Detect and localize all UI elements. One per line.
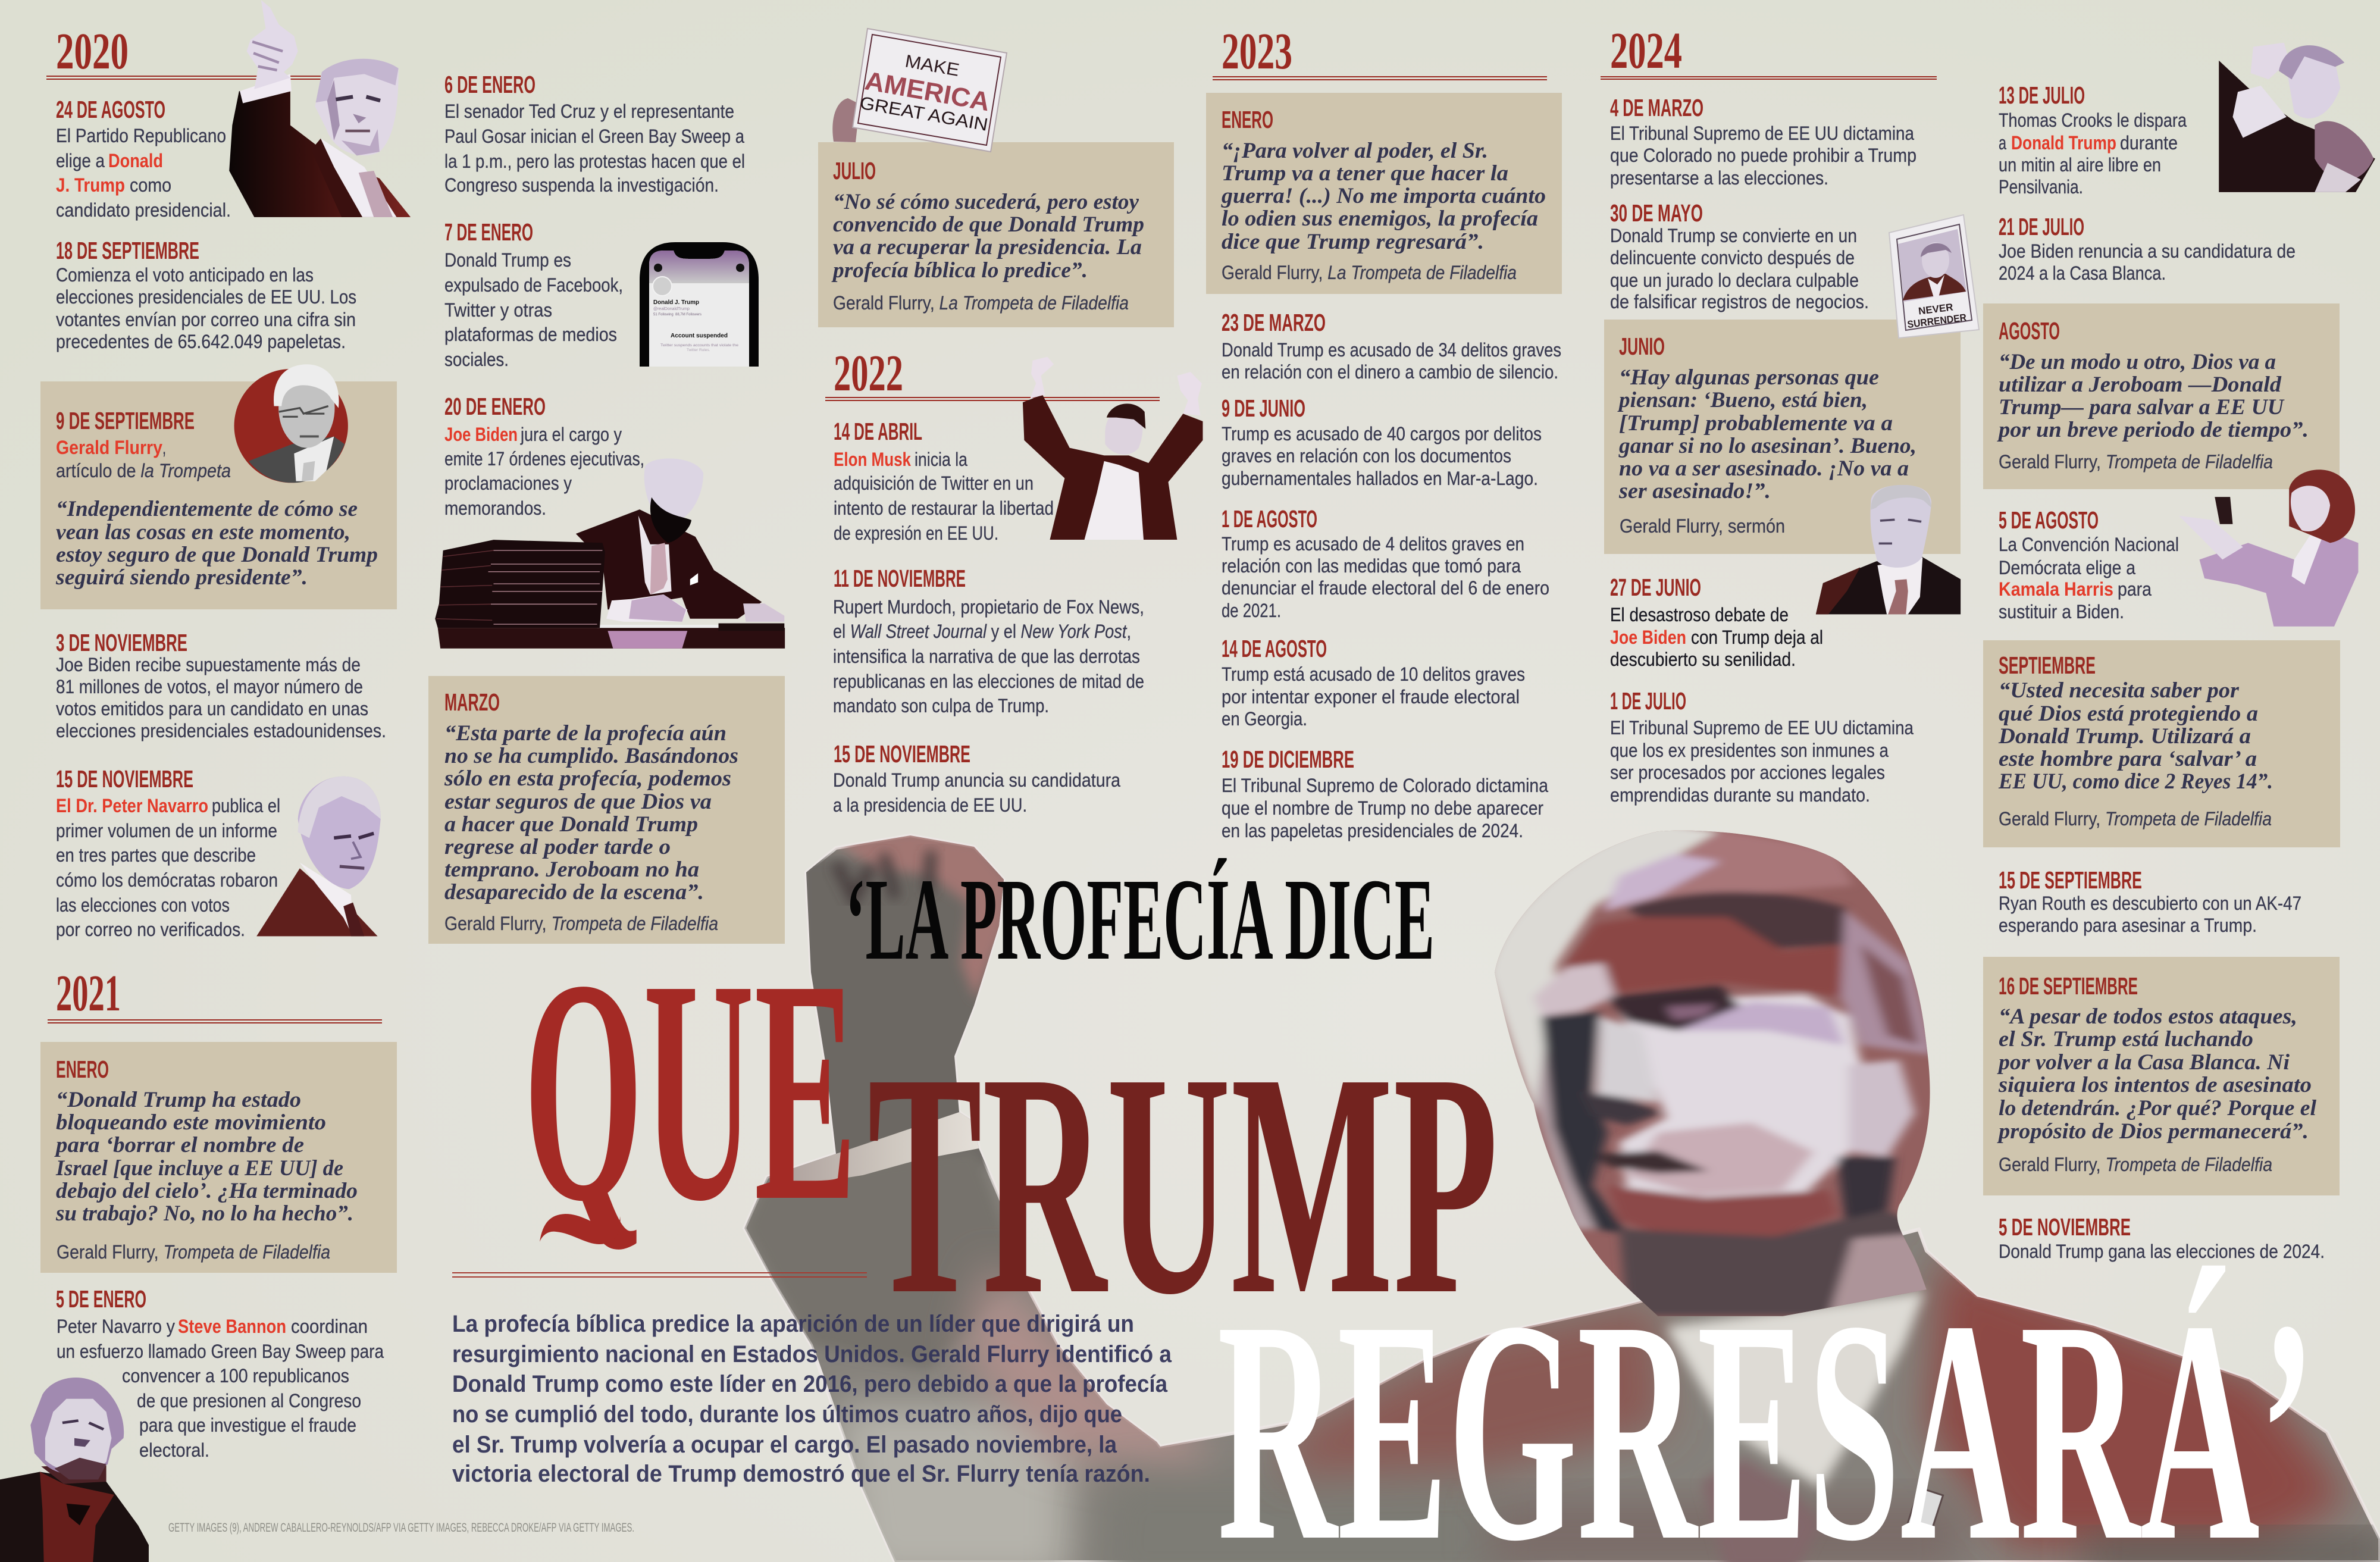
entry: 27 de junio: descubierto su senilidad. — [1610, 649, 1796, 670]
entry: 19 de diciembre — [1222, 746, 1548, 841]
entry: 11 de noviembre — [833, 565, 1144, 716]
entry: 18 de septiembre: elecciones presidenciales de EE UU. Los — [56, 286, 356, 308]
entry: 13 de julio: 13 DE JULIO — [1999, 82, 2085, 109]
entry: 13 de julio: durante — [2120, 132, 2178, 154]
entry: 11 de noviembre: mandato son culpa de Trump. — [833, 695, 1049, 716]
entry: 18 de septiembre: Comienza el voto anticipado en las — [56, 264, 314, 286]
quote box: enero: Trump va a tener que hacer la — [1222, 161, 1508, 186]
entry: 9 de junio — [1222, 395, 1542, 489]
entry: 11 de noviembre: intensifica la narrativa de que las derrotas — [833, 646, 1140, 667]
entry: 24 de agosto: J. Trump — [56, 174, 125, 196]
entry: 14 de abril: intento de restaurar la libertad — [834, 497, 1054, 519]
quote box: 9 de septiembre: artículo de la Trompeta — [56, 460, 231, 481]
quote box: 16 de septiembre: siquiera los intentos de asesinato — [1998, 1073, 2312, 1097]
quote box: julio — [818, 142, 1174, 327]
entry: 19 de diciembre: que el nombre de Trump no debe aparecer — [1222, 797, 1543, 819]
entry: 20 de enero: proclamaciones y — [444, 472, 572, 494]
entry: 3 de noviembre: Joe Biden recibe supuestamente más de — [56, 654, 361, 675]
entry: 15 de septiembre: 15 DE SEPTIEMBRE — [1999, 866, 2142, 894]
icon: phone with suspended account — [640, 242, 759, 367]
quote box: agosto: Gerald Flurry, Trompeta de Filadelfia — [1999, 451, 2273, 472]
quote box: 9 de septiembre: “Independientemente de cómo se — [56, 497, 358, 521]
title: 'La profecía dice: ‘LA PROFECÍA DICE — [845, 854, 1435, 984]
entry: 4 de marzo: presentarse a las elecciones. — [1610, 167, 1828, 189]
entry: 27 de junio — [1610, 574, 1823, 670]
entry: 20 de enero: emite 17 órdenes ejecutivas, — [444, 448, 644, 469]
entry: 21 de julio: Joe Biden renuncia a su candidatura de — [1999, 240, 2296, 262]
entry: 24 de agosto: como — [130, 174, 171, 196]
entry: 1 de julio: emprendidas durante su mandato. — [1610, 784, 1870, 806]
entry: 13 de julio: Pensilvania. — [1999, 176, 2083, 198]
entry: 14 de abril: Elon Musk — [834, 449, 911, 470]
panel: julio 2021 quote — [818, 29, 1174, 327]
entry: 14 de agosto — [1222, 635, 1525, 730]
entry: 14 de agosto: 14 DE AGOSTO — [1222, 635, 1327, 662]
entry: 5 de agosto: Kamala Harris — [1999, 578, 2113, 600]
quote box: marzo: a hacer que Donald Trump — [444, 812, 698, 837]
entry: 5 de enero: electoral. — [139, 1439, 209, 1461]
entry: 20 de enero: jura el cargo y — [520, 424, 622, 445]
shirt cuff — [767, 1112, 979, 1185]
entry: 1 de agosto: denunciar el fraude electoral del 6 de enero — [1222, 577, 1549, 599]
entry: 27 de junio: con Trump deja al — [1691, 627, 1823, 648]
panel: 2023 — [1206, 22, 1562, 841]
quote box: 16 de septiembre: el Sr. Trump está luchando — [1999, 1027, 2253, 1051]
entry: 6 de enero: la 1 p.m., pero las protestas hacen que el — [444, 151, 745, 172]
entry: 13 de julio: Donald Trump — [2011, 132, 2116, 154]
entry: 30 de mayo: delincuente convicto después de — [1610, 247, 1855, 268]
quote box: enero: debajo del cielo’. ¿Ha terminado — [56, 1179, 358, 1203]
entry: 1 de julio — [1610, 687, 1914, 806]
lapel pin — [1908, 1488, 1943, 1530]
entry: 15 de noviembre: en tres partes que describe — [56, 844, 256, 866]
entry: 24 de agosto: 24 DE AGOSTO — [56, 96, 165, 123]
entry: 11 de noviembre: Rupert Murdoch, propietario de Fox News, — [833, 596, 1144, 618]
quote box: enero: dice que Trump regresará”. — [1222, 230, 1484, 254]
quote box: agosto: AGOSTO — [1999, 317, 2060, 345]
entry: 5 de agosto — [1999, 506, 2179, 622]
entry: 15 de noviembre: por correo no verificados. — [56, 919, 245, 940]
entry: 9 de junio: graves en relación con los documentos — [1222, 445, 1511, 467]
quote box: septiembre: qué Dios está protegiendo a — [1999, 702, 2258, 726]
entry: 9 de junio: gubernamentales hallados en Mar-a-Lago. — [1222, 468, 1538, 489]
intro paragraph: La profecía bíblica predice la aparición de un líder que dirigirá un — [452, 1311, 1134, 1337]
quote box: septiembre: este hombre para ‘salvar’ a — [1999, 747, 2257, 771]
panel: 2021 — [0, 964, 397, 1562]
photo: Gerald Flurry — [234, 364, 348, 483]
quote box: enero: ENERO — [56, 1056, 109, 1083]
quote box: 9 de septiembre: Gerald Flurry — [56, 437, 162, 458]
panel: 2022 — [825, 344, 1202, 816]
entry: 15 de noviembre: Donald Trump anuncia su candidatura — [833, 769, 1120, 791]
quote box: 9 de septiembre: seguirá siendo presidente”. — [55, 565, 308, 590]
entry: 5 de enero: coordinan — [291, 1316, 368, 1337]
quote box: agosto: Trump— para salvar a EE UU — [1999, 395, 2285, 420]
quote box: septiembre — [1983, 640, 2340, 847]
entry: 5 de noviembre: 5 DE NOVIEMBRE — [1999, 1213, 2131, 1241]
entry: 15 de noviembre: publica el — [212, 795, 280, 816]
icon: phone with suspended account: Twitter suspends accounts that violate the — [660, 343, 738, 348]
quote box: enero — [40, 1042, 397, 1273]
quote box: enero: “Donald Trump ha estado — [56, 1088, 301, 1112]
quote box: julio: “No sé cómo sucederá, pero estoy — [833, 190, 1139, 214]
entry: 19 de diciembre: El Tribunal Supremo de Colorado dictamina — [1222, 775, 1548, 796]
icon: Make America Great Again sign: GREAT AGAIN — [858, 93, 989, 135]
entry: 5 de noviembre — [1999, 1213, 2325, 1262]
entry: 7 de enero: sociales. — [444, 349, 509, 370]
panel: 2021 continued — [428, 71, 785, 944]
entry: 1 de julio: ser procesados por acciones legales — [1610, 762, 1885, 783]
entry: 9 de junio: 9 DE JUNIO — [1222, 395, 1305, 422]
photo: large portrait of Trump — [1495, 831, 1930, 1316]
quote box: enero: lo odien sus enemigos, la profecía — [1222, 206, 1538, 231]
entry: 19 de diciembre: 19 DE DICIEMBRE — [1222, 746, 1354, 773]
entry: 14 de agosto: por intentar exponer el fraude electoral — [1222, 686, 1520, 708]
entry: 15 de noviembre: a la presidencia de EE UU. — [833, 794, 1027, 816]
intro paragraph: no se cumplió del todo, durante los últimos cuatro años, dijo que — [452, 1401, 1122, 1428]
photo: Kamala Harris — [2179, 469, 2358, 627]
quote box: marzo: temprano. Jeroboam no ha — [444, 857, 699, 882]
quote box: julio: Gerald Flurry, La Trompeta de Filadelfia — [833, 292, 1129, 314]
entry: 13 de julio — [1999, 82, 2187, 198]
entry: 15 de noviembre: 15 DE NOVIEMBRE — [56, 765, 193, 793]
quote box: junio: ganar si no lo asesinan’. Bueno, — [1618, 434, 1916, 458]
quote box: enero: para ‘borrar el nombre de — [54, 1133, 304, 1157]
title: Trump: TRUMP — [868, 1007, 1498, 1360]
entry: 14 de abril — [834, 418, 1054, 544]
entry: 1 de julio: 1 DE JULIO — [1610, 687, 1686, 715]
quote box: junio: JUNIO — [1619, 333, 1665, 360]
quote box: agosto: utilizar a Jeroboam —Donald — [1999, 372, 2282, 397]
entry: 7 de enero: 7 DE ENERO — [444, 218, 533, 246]
entry: 5 de agosto: para — [2118, 578, 2152, 600]
quote box: marzo: estar seguros de que Dios va — [444, 790, 712, 814]
entry: 18 de septiembre — [56, 237, 356, 352]
photo: Steve Bannon — [0, 1378, 149, 1562]
entry: 7 de enero: plataformas de medios — [444, 324, 617, 345]
photo: Peter Navarro — [256, 777, 381, 936]
entry: 14 de agosto: Trump está acusado de 10 delitos graves — [1222, 663, 1525, 685]
intro paragraph: resurgimiento nacional en Estados Unidos. Gerald Flurry identificó a — [452, 1341, 1172, 1367]
quote box: 9 de septiembre: vean las cosas en este momento, — [56, 520, 350, 544]
quote box: 16 de septiembre — [1983, 957, 2340, 1195]
entry: 21 de julio — [1999, 213, 2296, 284]
quote box: 16 de septiembre: 16 DE SEPTIEMBRE — [1999, 972, 2138, 1000]
intro rule — [452, 1273, 867, 1277]
icon: phone with suspended account: @realDonaldTrump — [653, 307, 690, 311]
entry: 30 de mayo: 30 DE MAYO — [1610, 199, 1703, 227]
quote box: marzo: desaparecido de la escena”. — [444, 880, 704, 904]
icon: phone with suspended account: Twitter Rules. — [687, 348, 710, 352]
quote box: septiembre: EE UU, como dice 2 Reyes 14”. — [1998, 769, 2273, 794]
quote box: enero: “¡Para volver al poder, el Sr. — [1222, 139, 1488, 163]
entry: 1 de julio: El Tribunal Supremo de EE UU dictamina — [1610, 717, 1914, 738]
quote box: agosto — [1983, 303, 2340, 489]
entry: 3 de noviembre: 81 millones de votos, el mayor número de — [56, 676, 363, 697]
icon: Never Surrender mugshot poster — [1889, 215, 1979, 338]
quote box: enero: su trabajo? No, no lo ha hecho”. — [55, 1201, 353, 1226]
entry: 18 de septiembre: 18 DE SEPTIEMBRE — [56, 237, 199, 264]
entry: 5 de agosto: sustituir a Biden. — [1999, 601, 2124, 622]
entry: 4 de marzo — [1610, 94, 1916, 189]
quote box: junio: piensan: ‘Bueno, está bien, — [1617, 388, 1868, 412]
year heading 2023: 2023 — [1222, 22, 1292, 80]
entry: 14 de agosto: en Georgia. — [1222, 708, 1307, 730]
quote box: junio: [Trump] probablemente va a — [1619, 411, 1893, 436]
intro paragraph: Donald Trump como este líder en 2016, pero debido a que la profecía — [452, 1371, 1168, 1397]
entry: 5 de enero: 5 DE ENERO — [56, 1285, 146, 1313]
quote box: marzo: MARZO — [444, 688, 500, 716]
quote box: septiembre: “Usted necesita saber por — [1999, 678, 2240, 703]
entry: 15 de noviembre: las elecciones con votos — [56, 894, 230, 916]
entry: 5 de agosto: Demócrata elige a — [1999, 557, 2135, 578]
icon: Make America Great Again sign: AMERICA — [863, 66, 992, 117]
icon: Never Surrender mugshot poster: SURRENDER — [1907, 312, 1967, 330]
quote box: 16 de septiembre: Gerald Flurry, Trompeta de Filadelfia — [1999, 1154, 2272, 1175]
quote box: julio: convencido de que Donald Trump — [833, 212, 1144, 237]
entry: 13 de julio: un mitin al aire libre en — [1999, 154, 2161, 176]
icon: Make America Great Again sign — [832, 29, 1007, 152]
photo: raised fist, arm and torso — [744, 830, 2380, 1562]
entry: 20 de enero — [444, 393, 644, 519]
entry: 24 de agosto: El Partido Republicano — [56, 125, 226, 146]
entry: 15 de noviembre: El Dr. Peter Navarro — [56, 795, 208, 816]
entry: 11 de noviembre: 11 DE NOVIEMBRE — [834, 565, 966, 592]
year heading 2020: 2020 — [56, 22, 129, 80]
entry: 5 de agosto: 5 DE AGOSTO — [1999, 506, 2099, 534]
quote box: 16 de septiembre: “A pesar de todos estos ataques, — [1999, 1004, 2297, 1029]
entry: 3 de noviembre: 3 DE NOVIEMBRE — [56, 629, 187, 656]
entry: 23 de marzo: en relación con el dinero a cambio de silencio. — [1222, 361, 1558, 383]
entry: 24 de agosto: elige a — [56, 150, 105, 171]
entry: 20 de enero: 20 DE ENERO — [444, 393, 546, 420]
entry: 21 de julio: 2024 a la Casa Blanca. — [1999, 262, 2166, 284]
entry: 30 de mayo: Donald Trump se convierte en un — [1610, 225, 1857, 246]
entry: 9 de junio: Trump es acusado de 40 cargos por delitos — [1222, 423, 1542, 445]
entry: 14 de abril: inicia la — [915, 449, 967, 470]
quote box: junio — [1604, 320, 1961, 554]
entry: 1 de agosto: de 2021. — [1222, 600, 1281, 621]
entry: 5 de enero: Peter Navarro y — [57, 1316, 175, 1337]
entry: 6 de enero: Congreso suspenda la investigación. — [444, 174, 719, 196]
quote box: agosto: “De un modo u otro, Dios va a — [1999, 350, 2276, 374]
quote box: julio: profecía bíblica lo predice”. — [831, 258, 1088, 283]
photo: Trump pointing — [229, 0, 411, 217]
entry: 14 de abril: de expresión en EE UU. — [834, 522, 998, 544]
title: Que — [524, 913, 857, 1267]
entry: 21 de julio: 21 DE JULIO — [1999, 213, 2084, 240]
quote box: julio: va a recuperar la presidencia. La — [833, 235, 1142, 259]
entry: 15 de noviembre — [56, 765, 280, 940]
photo: Elon Musk arms raised — [1023, 357, 1202, 540]
quote box: 9 de septiembre: 9 DE SEPTIEMBRE — [56, 407, 195, 434]
entry: 7 de enero: expulsado de Facebook, — [444, 274, 623, 296]
entry: 1 de agosto: relación con las medidas que tomó para — [1222, 555, 1521, 577]
entry: 15 de noviembre: primer volumen de un informe — [56, 820, 277, 841]
entry: 19 de diciembre: en las papeletas presidenciales de 2024. — [1222, 820, 1523, 841]
entry: 7 de enero: Donald Trump es — [444, 249, 571, 271]
quote box: 16 de septiembre: lo detendrán. ¿Por qué? Porque el — [1999, 1096, 2317, 1120]
year heading 2021: 2021 — [56, 964, 121, 1022]
icon: Make America Great Again sign: MAKE — [903, 51, 961, 80]
entry: 20 de enero: memorandos. — [444, 497, 546, 519]
entry: 27 de junio: 27 DE JUNIO — [1610, 574, 1701, 601]
intro paragraph: victoria electoral de Trump demostró que el Sr. Flurry tenía razón. — [452, 1461, 1150, 1487]
quote box: enero: Israel [que incluye a EE UU] de — [55, 1156, 343, 1181]
entry: 30 de mayo: que un jurado lo declara culpable — [1610, 270, 1859, 291]
entry: 1 de agosto — [1222, 505, 1549, 621]
quote box: 16 de septiembre: por volver a la Casa Blanca. Ni — [1997, 1050, 2290, 1075]
entry: 1 de julio: que los ex presidentes son inmunes a — [1610, 740, 1889, 761]
entry: 27 de junio: El desastroso debate de — [1610, 604, 1789, 625]
entry: 5 de enero: un esfuerzo llamado Green Bay Sweep para — [57, 1341, 384, 1362]
entry: 15 de septiembre — [1999, 866, 2301, 936]
quote box: marzo: Gerald Flurry, Trompeta de Filadelfia — [444, 913, 718, 934]
quote box: julio: JULIO — [833, 157, 876, 184]
photo credit: GETTY IMAGES (9), ANDREW CABALLERO-REYNOLDS/AFP VIA GETTY IMAGES, REBECCA DROKE/AFP VIA GETTY IMAGES. — [168, 1521, 634, 1535]
entry: 11 de noviembre: republicanas en las elecciones de mitad de — [833, 671, 1144, 692]
entry: 20 de enero: Joe Biden — [444, 424, 518, 445]
entry: 14 de abril: 14 DE ABRIL — [834, 418, 922, 445]
quote box: agosto: por un breve periodo de tiempo”. — [1997, 418, 2309, 442]
entry: 5 de agosto: La Convención Nacional — [1999, 534, 2179, 555]
entry: 5 de enero: Steve Bannon — [178, 1316, 286, 1337]
entry: 7 de enero — [444, 218, 623, 370]
entry: 27 de junio: Joe Biden — [1610, 627, 1686, 648]
icon: phone with suspended account: Donald J. Trump — [653, 299, 699, 306]
year heading 2022: 2022 — [834, 344, 903, 402]
entry: 30 de mayo: de falsificar registros de negocios. — [1610, 291, 1869, 312]
entry: 15 de septiembre: esperando para asesinar a Trump. — [1999, 915, 2257, 936]
photo: Joe Biden at debate — [1816, 485, 1961, 614]
entry: 7 de enero: Twitter y otras — [444, 299, 552, 321]
quote box: enero: ENERO — [1222, 106, 1273, 133]
entry: 1 de agosto: 1 DE AGOSTO — [1222, 505, 1317, 533]
entry: 23 de marzo — [1222, 309, 1561, 383]
entry: 13 de julio: a — [1999, 132, 2006, 154]
entry: 5 de enero: de que presionen al Congreso — [137, 1390, 361, 1411]
quote box: 16 de septiembre: propósito de Dios permanecerá”. — [1997, 1119, 2309, 1144]
quote box: junio: ser asesinado!”. — [1618, 479, 1771, 503]
entry: 15 de noviembre — [833, 740, 1120, 816]
entry: 1 de agosto: Trump es acusado de 4 delitos graves en — [1222, 533, 1524, 555]
panel: 2024 — [1601, 21, 1979, 806]
entry: 6 de enero — [444, 71, 745, 196]
entry: 24 de agosto — [56, 96, 231, 221]
quote box: enero: Gerald Flurry, La Trompeta de Filadelfia — [1222, 262, 1517, 283]
quote box: septiembre: Donald Trump. Utilizará a — [1998, 724, 2251, 749]
intro paragraph: el Sr. Trump volvería a ocupar el cargo. El pasado noviembre, la — [452, 1432, 1117, 1458]
year heading 2024: 2024 — [1610, 21, 1682, 79]
entry: 6 de enero: Paul Gosar inician el Green Bay Sweep a — [444, 126, 744, 147]
quote box: marzo: no se ha cumplido. Basándonos — [444, 744, 738, 768]
photo: Biden signing at desk — [435, 458, 785, 649]
entry: 11 de noviembre: el Wall Street Journal y el New York Post, — [833, 621, 1131, 642]
entry: 30 de mayo — [1610, 199, 1869, 312]
entry: 15 de noviembre: 15 DE NOVIEMBRE — [834, 740, 970, 768]
entry: 5 de enero: convencer a 100 republicanos — [122, 1365, 349, 1386]
quote box: junio: no va a ser asesinado. ¡No va a — [1619, 456, 1909, 481]
entry: 15 de noviembre: cómo los demócratas robaron — [56, 869, 278, 891]
quote box: enero: Gerald Flurry, Trompeta de Filadelfia — [57, 1241, 330, 1263]
photo: Trump after shooting — [2219, 43, 2375, 192]
quote box: marzo: “Esta parte de la profecía aún — [444, 721, 726, 746]
entry: 4 de marzo: 4 DE MARZO — [1610, 94, 1703, 121]
entry: 6 de enero: El senador Ted Cruz y el representante — [444, 101, 734, 122]
panel: 2020 — [40, 0, 411, 940]
entry: 5 de noviembre: Donald Trump gana las elecciones de 2024. — [1999, 1241, 2325, 1262]
quote box: 9 de septiembre: estoy seguro de que Donald Trump — [56, 543, 378, 567]
panel: 2024 continued — [1983, 43, 2375, 1262]
icon: Never Surrender mugshot poster: NEVER — [1918, 302, 1954, 317]
quote box: 9 de septiembre: , — [162, 437, 166, 458]
entry: 14 de abril: adquisición de Twitter en un — [834, 472, 1034, 494]
quote box: 9 de septiembre — [40, 364, 397, 609]
entry: 13 de julio: Thomas Crooks le dispara — [1999, 109, 2187, 131]
icon: phone with suspended account: Account suspended — [671, 333, 728, 339]
entry: 23 de marzo: Donald Trump es acusado de 34 delitos graves — [1222, 339, 1561, 361]
entry: 5 de enero — [56, 1285, 384, 1461]
quote box: junio: Gerald Flurry, sermón — [1620, 515, 1785, 537]
entry: 3 de noviembre: votos emitidos para un candidato en unas — [56, 698, 368, 719]
entry: 15 de septiembre: Ryan Routh es descubierto con un AK-47 — [1999, 893, 2301, 914]
entry: 3 de noviembre: elecciones presidenciales estadounidenses. — [56, 720, 386, 741]
intro paragraph — [452, 1311, 1172, 1487]
text: QUE — [524, 913, 857, 1267]
quote box: enero: guerra! (...) No me importa cuánto — [1221, 184, 1546, 208]
quote box: enero — [1206, 93, 1562, 294]
quote box: marzo: sólo en esta profecía, podemos — [444, 766, 731, 791]
entry: 18 de septiembre: votantes envían por correo una cifra sin — [56, 309, 356, 330]
quote box: marzo — [428, 676, 785, 944]
entry: 4 de marzo: que Colorado no puede prohibir a Trump — [1610, 145, 1916, 166]
entry: 5 de enero: para que investigue el fraude — [139, 1414, 356, 1436]
quote box: enero: bloqueando este movimiento — [56, 1110, 326, 1135]
entry: 6 de enero: 6 DE ENERO — [444, 71, 536, 98]
entry: 23 de marzo: 23 DE MARZO — [1222, 309, 1326, 336]
quote box: junio: “Hay algunas personas que — [1619, 365, 1879, 390]
entry: 3 de noviembre — [56, 629, 386, 741]
entry: 24 de agosto: candidato presidencial. — [56, 199, 231, 221]
entry: 4 de marzo: El Tribunal Supremo de EE UU dictamina — [1610, 123, 1914, 144]
quote box: marzo: regrese al poder tarde o — [444, 835, 671, 859]
quote box: septiembre: SEPTIEMBRE — [1999, 652, 2096, 679]
entry: 24 de agosto: Donald — [108, 150, 163, 171]
entry: 18 de septiembre: precedentes de 65.642.049 papeletas. — [56, 331, 346, 352]
quote box: septiembre: Gerald Flurry, Trompeta de Filadelfia — [1999, 808, 2272, 829]
icon: phone with suspended account: 51 Following 88,7M Followers — [653, 313, 702, 317]
